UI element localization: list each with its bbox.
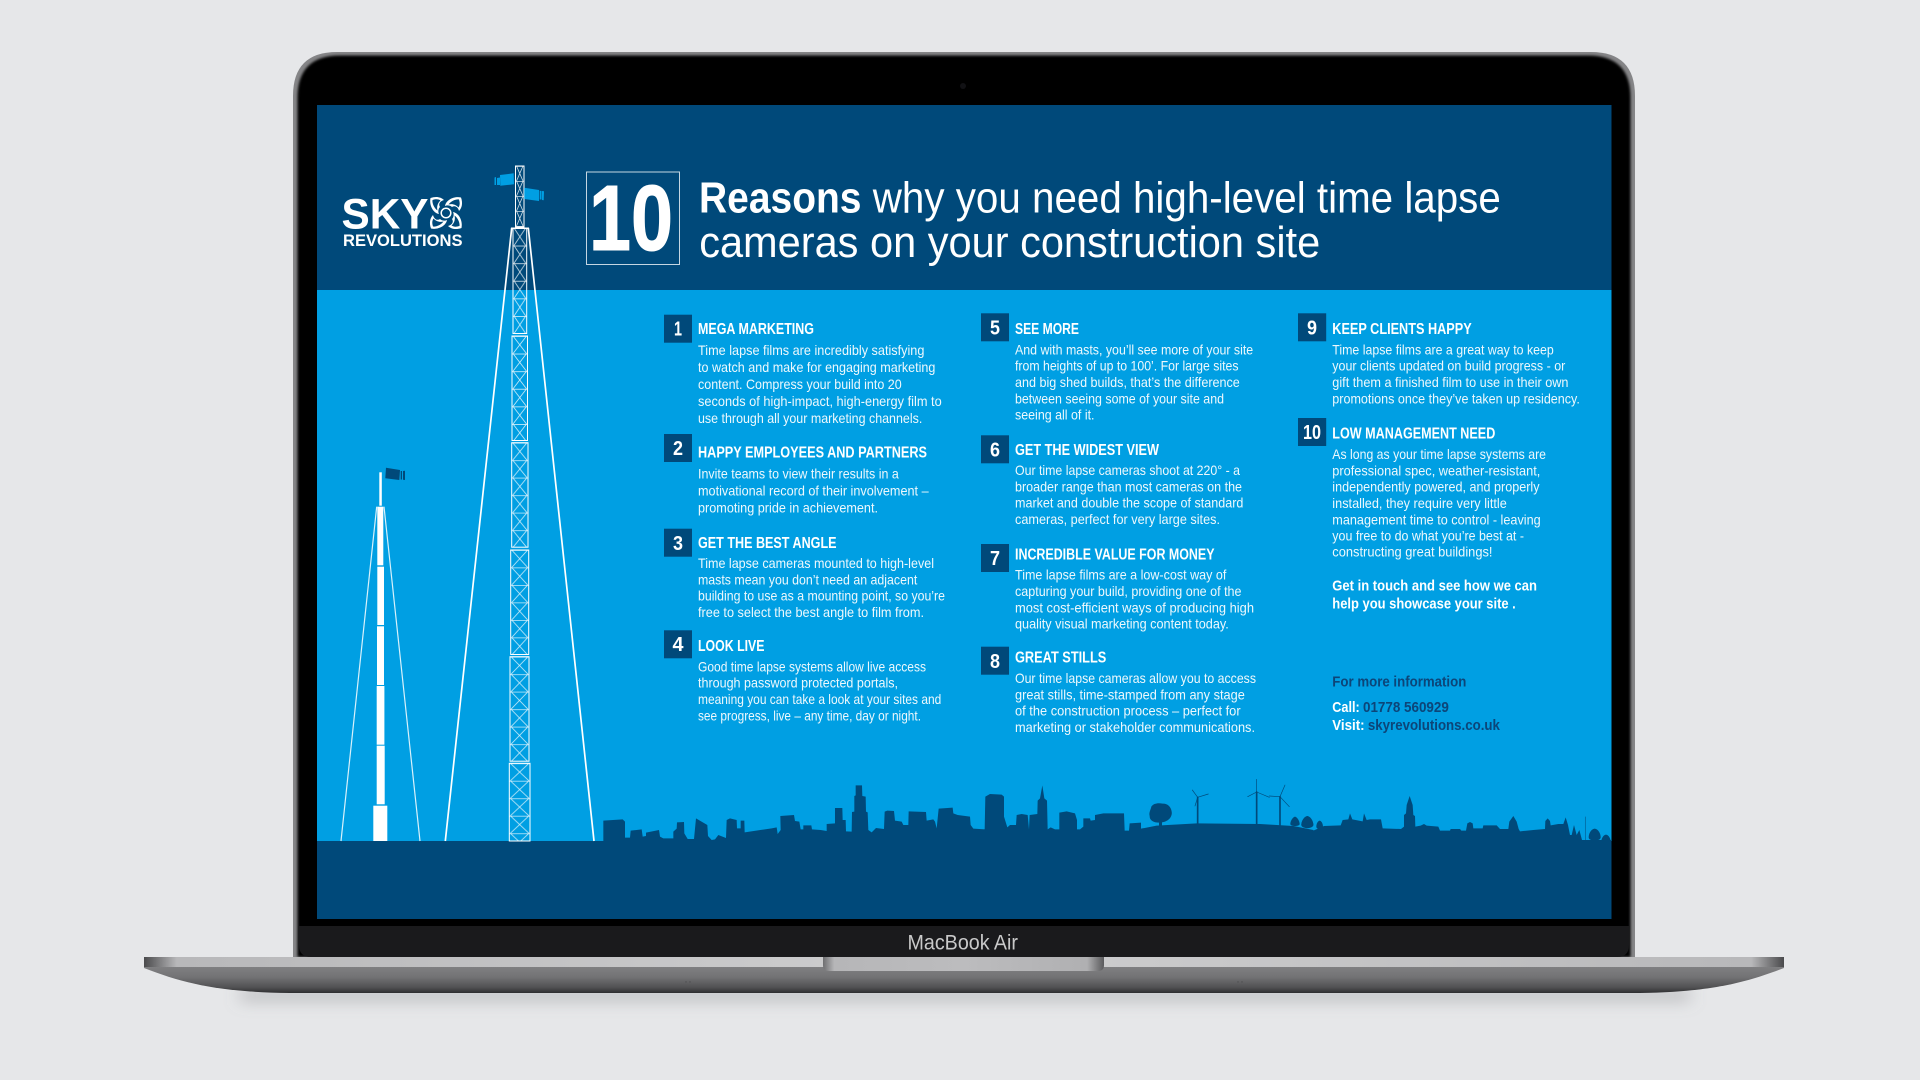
laptop shadow xyxy=(240,990,1690,1000)
reason 3 xyxy=(664,529,945,620)
small mast xyxy=(341,468,420,841)
header band xyxy=(317,105,1612,290)
reason 10 xyxy=(1298,418,1546,560)
reason 5: SEE MORE xyxy=(1015,321,1079,338)
laptop bezel xyxy=(298,56,1630,957)
reason 10: LOW MANAGEMENT NEED xyxy=(1332,426,1495,443)
reason 3: building to use as a mounting point, so you’re xyxy=(698,588,945,604)
webcam xyxy=(960,83,966,89)
reason 3: Time lapse cameras mounted to high-level xyxy=(698,555,934,571)
reason 1: seconds of high-impact, high-energy film to xyxy=(698,393,942,409)
reason 9 xyxy=(1298,313,1580,406)
reason 5: 5 xyxy=(990,318,1000,340)
reason 3: 3 xyxy=(673,533,683,555)
reason 9: your clients updated on build progress - or xyxy=(1332,358,1566,374)
small mast camera xyxy=(385,468,405,480)
ground band xyxy=(317,841,1612,919)
reason 5 xyxy=(981,313,1253,423)
reason 7: most cost-efficient ways of producing high xyxy=(1015,599,1254,615)
call to action xyxy=(1332,578,1537,612)
reason 9: promotions once they’ve taken up residency. xyxy=(1332,390,1580,406)
reason 10: 10 xyxy=(1303,422,1321,444)
reason 7 xyxy=(981,544,1254,632)
town and church spires right xyxy=(1300,796,1611,843)
reason 2: motivational record of their involvement – xyxy=(698,483,929,499)
city buildings left xyxy=(590,785,990,843)
reason 1: MEGA MARKETING xyxy=(698,321,814,338)
call to action: help you showcase your site . xyxy=(1332,596,1516,612)
reason 4: LOOK LIVE xyxy=(698,638,764,655)
reason 1: 1 xyxy=(674,318,682,340)
tall mast lattice sections xyxy=(509,166,530,841)
reason 3: GET THE BEST ANGLE xyxy=(698,535,836,552)
title: Reasons xyxy=(699,174,862,223)
title: cameras on your construction site xyxy=(699,218,1320,267)
reason 7: Time lapse films are a low-cost way of xyxy=(1015,567,1226,583)
reason 4: Good time lapse systems allow live access xyxy=(698,658,926,674)
base feet xyxy=(685,981,1243,983)
reason 7: INCREDIBLE VALUE FOR MONEY xyxy=(1015,547,1215,564)
reason 4: meaning you can take a look at your sites and xyxy=(698,691,941,707)
reason 8 xyxy=(981,647,1256,735)
tall mast collar xyxy=(511,228,529,229)
reason 6: cameras, perfect for very large sites. xyxy=(1015,511,1220,527)
reason 8: marketing or stakeholder communications. xyxy=(1015,719,1255,735)
reason 10: independently powered, and properly xyxy=(1332,479,1540,495)
icon: propeller xyxy=(430,197,462,229)
brand label: MacBook Air xyxy=(908,932,1018,954)
tall lattice mast xyxy=(445,166,594,841)
reason 10: constructing great buildings! xyxy=(1332,544,1492,560)
reason 3: free to select the best angle to film from. xyxy=(698,604,924,620)
reason 5: And with masts, you’ll see more of your site xyxy=(1015,341,1253,357)
reason 2 xyxy=(664,434,929,516)
reason 2: 2 xyxy=(673,438,683,460)
base top strip xyxy=(144,957,1784,967)
reason 4: see progress, live – any time, day or night. xyxy=(698,707,921,723)
contact information: For more information xyxy=(1332,674,1466,690)
call to action: Get in touch and see how we can xyxy=(1332,578,1537,594)
wind turbines xyxy=(1192,779,1289,825)
laptop base xyxy=(144,957,1784,993)
reason 6 xyxy=(981,435,1243,527)
reason 9: Time lapse films are a great way to keep xyxy=(1332,341,1554,357)
contact information: 01778 560929 xyxy=(1363,699,1449,716)
reason 3: masts mean you don’t need an adjacent xyxy=(698,571,917,587)
laptop chin xyxy=(299,926,1629,957)
reason 1: to watch and make for engaging marketing xyxy=(698,359,935,375)
reason 4: 4 xyxy=(672,634,684,656)
title number box: 10 xyxy=(589,166,673,270)
small trees xyxy=(1290,816,1323,829)
title xyxy=(699,174,1501,267)
reason 2: Invite teams to view their results in a xyxy=(698,466,899,482)
reason 1: content. Compress your build into 20 xyxy=(698,376,902,392)
logo: Sky Revolutions: SKY xyxy=(342,190,428,238)
reason 2: HAPPY EMPLOYEES AND PARTNERS xyxy=(698,445,927,462)
reason 6: GET THE WIDEST VIEW xyxy=(1015,442,1159,459)
reason 10: you free to do what you’re best at - xyxy=(1332,527,1524,543)
logo: Sky Revolutions: REVOLUTIONS xyxy=(343,232,462,250)
reason 10: management time to control - leaving xyxy=(1332,511,1541,527)
reason 8: 8 xyxy=(990,651,1000,673)
reason 8: Our time lapse cameras allow you to access xyxy=(1015,670,1256,686)
far right trees xyxy=(1301,816,1611,843)
laptop mockup xyxy=(144,52,1784,1000)
reason 6: broader range than most cameras on the xyxy=(1015,478,1242,494)
reason 8: of the construction process – perfect for xyxy=(1015,703,1241,719)
reason 1 xyxy=(664,315,942,426)
contact information: Call: xyxy=(1332,699,1360,716)
reason 5: from heights of up to 100’. For large sites xyxy=(1015,358,1238,374)
reason 7: quality visual marketing content today. xyxy=(1015,616,1229,632)
laptop lid frame xyxy=(293,52,1635,957)
reason 5: seeing all of it. xyxy=(1015,407,1094,423)
small mast pole xyxy=(373,472,387,841)
reason 8: great stills, time-stamped from any stage xyxy=(1015,686,1245,702)
reason 7: 7 xyxy=(990,548,1000,570)
tall mast cameras xyxy=(494,173,544,201)
light blue body xyxy=(317,290,1612,841)
tall mast guy wires xyxy=(445,228,594,841)
reason 10: installed, they require very little xyxy=(1332,495,1507,511)
reason 6: 6 xyxy=(990,440,1000,462)
contact information: skyrevolutions.co.uk xyxy=(1368,717,1500,734)
logo: Sky Revolutions xyxy=(342,190,462,250)
contact information: Visit: xyxy=(1332,717,1365,734)
reason 1: Time lapse films are incredibly satisfying xyxy=(698,342,924,358)
reason 1: use through all your marketing channels. xyxy=(698,410,922,426)
reason 10: professional spec, weather-resistant, xyxy=(1332,462,1540,478)
reason 5: between seeing some of your site and xyxy=(1015,390,1224,406)
contact information xyxy=(1332,674,1500,734)
reason 2: promoting pride in achievement. xyxy=(698,500,878,516)
reason 4 xyxy=(664,630,941,723)
infographic screen xyxy=(317,105,1612,919)
base notch xyxy=(823,957,1104,971)
reason 9: KEEP CLIENTS HAPPY xyxy=(1332,321,1472,338)
title: why you need high-level time lapse xyxy=(872,174,1501,223)
reason 10: As long as your time lapse systems are xyxy=(1332,446,1546,462)
small mast guy wires xyxy=(341,507,420,841)
reason 6: Our time lapse cameras shoot at 220° - a xyxy=(1015,462,1240,478)
reason 9: 9 xyxy=(1307,318,1317,340)
reason 6: market and double the scope of standard xyxy=(1015,495,1243,511)
reason 9: gift them a finished film to use in their own xyxy=(1332,374,1568,390)
reason 7: capturing your build, providing one of the xyxy=(1015,583,1242,599)
city buildings centre and hill xyxy=(980,785,1317,843)
reason 8: GREAT STILLS xyxy=(1015,650,1106,667)
skyline xyxy=(590,779,1611,843)
reason 5: and big shed builds, that’s the difference xyxy=(1015,374,1240,390)
reason 4: through password protected portals, xyxy=(698,675,898,691)
tree on hill xyxy=(1149,803,1172,827)
